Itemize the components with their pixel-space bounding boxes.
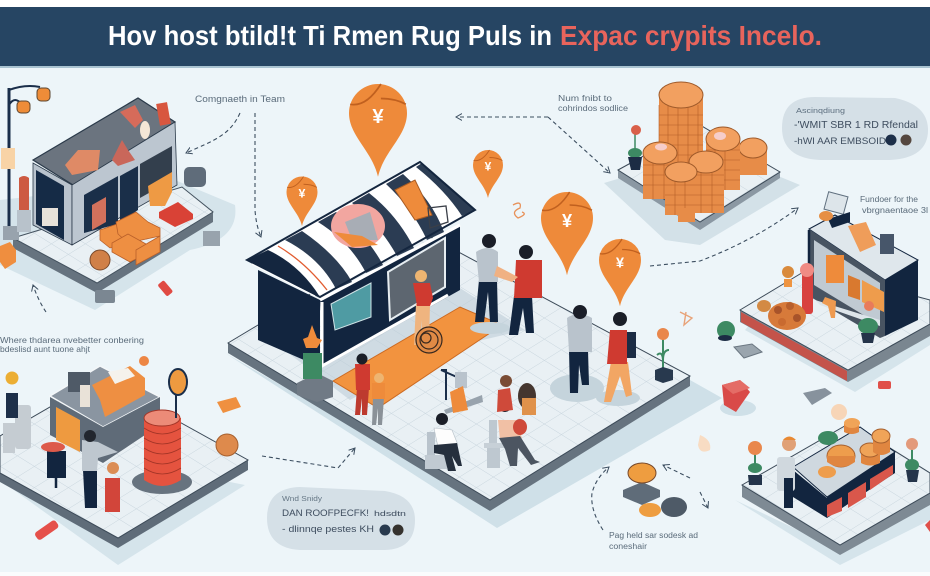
arrow: bottom-left: [262, 448, 355, 468]
seated man: [425, 413, 462, 471]
balloon sign: [169, 369, 187, 418]
pin 1: ¥: [372, 106, 384, 128]
flourish left of platform: [698, 435, 710, 452]
small orange pot: [782, 266, 794, 287]
ticket: [157, 280, 173, 297]
counter: [793, 427, 895, 518]
pin 3: ¥: [485, 159, 492, 173]
striped roof: [247, 162, 475, 297]
label: left bottom: Where thdarea nvebetter conbering: [0, 335, 144, 345]
arrow: to main platform: [592, 467, 609, 530]
left wall: [258, 270, 320, 367]
pin 1: [349, 84, 407, 177]
pin 5: ¥: [616, 255, 625, 271]
scene: bottom-left stall: [0, 356, 248, 565]
label: left bottom: [0, 335, 144, 354]
poster screen: [331, 283, 371, 330]
man in shirt: [82, 430, 118, 508]
fruit heap: [757, 300, 806, 330]
machine: [441, 370, 483, 414]
round pie: [90, 250, 110, 270]
arrow: to coin platform: [548, 117, 610, 173]
potted flower left: [748, 441, 762, 485]
small flourish lower right: [680, 312, 692, 325]
people on main platform: [355, 234, 640, 471]
woman with orange trousers: [596, 312, 640, 406]
woman in red top: [497, 375, 513, 412]
booth: [809, 192, 918, 338]
callout: top right: Ascinqdiung: [796, 108, 845, 115]
pin 2: [286, 176, 318, 226]
pin 4: ¥: [562, 211, 573, 231]
potted flower: [628, 125, 642, 170]
frame: [320, 225, 460, 300]
arrow: pin to right kiosk: [650, 208, 798, 266]
pin 4: [541, 192, 593, 275]
callout: bottom: - dlinnqe pestes KH: [282, 524, 374, 535]
arrow: to kiosk: [186, 113, 240, 153]
man in red shirt: [494, 245, 542, 335]
shop building: [247, 162, 475, 367]
red box: [159, 202, 193, 227]
label: coin display: [609, 531, 698, 551]
title banner: Expac crypits Incelo.: [560, 20, 822, 51]
kiosk body: [33, 98, 177, 245]
visitor in red: [355, 354, 370, 415]
stall box: [50, 356, 160, 463]
label: coin stacks: Num fnibt to: [558, 94, 613, 103]
man in grey shirt: [470, 234, 510, 334]
glass door: [388, 238, 445, 320]
callout: bottom: hdsdtn: [374, 511, 406, 518]
standing man right: [550, 305, 604, 402]
red cube: [720, 380, 756, 416]
ticket: [34, 519, 60, 541]
planter by shop: [297, 325, 333, 402]
stack front: [665, 162, 697, 222]
coin display: [623, 463, 687, 517]
person with bag: [518, 383, 536, 415]
label: coin display: Pag held sar sodesk ad: [609, 531, 698, 540]
label: right kiosk: vbrgnaentaoe 3l: [862, 206, 928, 215]
child in red coat: [105, 462, 120, 512]
pin 5: [599, 239, 641, 306]
potted flower right: [905, 438, 919, 482]
label: right kiosk: [860, 195, 928, 215]
main platform: [225, 218, 722, 528]
orange crate: [0, 242, 16, 269]
scene: top-left kiosk: [0, 98, 235, 310]
scene: bottom-right counter: [735, 404, 930, 565]
callout: bottom: Wnd Snidy: [282, 496, 323, 503]
pink-clad visitor: [800, 263, 814, 314]
callout: top right: [782, 97, 928, 160]
scene: right kiosk: [717, 192, 930, 392]
plant on floor: [717, 321, 735, 341]
bottom strip: [0, 572, 930, 576]
red tag: [878, 381, 891, 389]
plant and pole base: [17, 176, 31, 232]
shrub behind counter: [818, 431, 838, 445]
orange block: [217, 397, 241, 413]
map pins: [286, 84, 641, 306]
coin cakes: [818, 418, 890, 478]
small flourish near pin: [513, 203, 524, 218]
arrow: shop to coins: [456, 116, 548, 118]
arrow: to coin display: [663, 465, 690, 478]
arrow: down to shop: [255, 113, 261, 237]
side bag: [184, 167, 206, 187]
stack left: [643, 142, 677, 199]
title banner: [0, 0, 930, 68]
callout: bottom: DAN ROOFPECFK!: [282, 508, 369, 519]
arrow: kiosk up: [33, 285, 46, 312]
scene: coin stacks: [604, 82, 800, 245]
label: top-left: Comgnaeth in Team: [195, 94, 285, 104]
worker with yellow hat: [3, 372, 31, 453]
rooftop goods: [65, 102, 171, 175]
street lamp: [1, 86, 50, 226]
orange coin: [216, 434, 238, 456]
pin 3: [473, 150, 503, 198]
roof illustration: orange sack: [395, 180, 448, 228]
label: coin display: coneshair: [609, 542, 647, 551]
title banner: Hov host btild!t Ti Rmen Rug Puls in: [108, 20, 552, 51]
label: left bottom: bdeslisd aunt tuone ahjt: [0, 344, 91, 354]
label: coin stacks: [558, 94, 629, 113]
potted flower front: [858, 301, 878, 343]
rope coil: [416, 327, 442, 353]
label: coin stacks: cohrindos sodlice: [558, 104, 629, 113]
callout: top right: -'WMIT SBR 1 RD Rfendal: [794, 120, 918, 131]
front wall: [320, 225, 460, 367]
pin 2: ¥: [299, 186, 306, 200]
roof illustration: pink elephant: [331, 204, 385, 248]
faded flower: [831, 404, 847, 420]
small flower marker right: [925, 520, 930, 532]
tall coin stack: [659, 82, 703, 172]
small dog: [822, 297, 836, 318]
bin: [41, 442, 66, 488]
stack centre rear: [706, 127, 740, 190]
vendor: [777, 436, 796, 508]
callout: bottom: [267, 487, 415, 550]
flower pot right of main platform: [655, 328, 673, 383]
stack right rear: [739, 138, 767, 175]
grey book: [803, 388, 832, 405]
woman at shop door: [413, 270, 433, 345]
orange parcels: [100, 212, 160, 265]
stack front mid: [689, 151, 724, 213]
orange carpet: [333, 307, 502, 408]
callout: top right: -hWI AAR EMBSOID: [794, 136, 886, 147]
red cylinder stack: [132, 410, 192, 494]
arrow: bottom right: [700, 492, 708, 508]
label: right kiosk: Fundoer for the: [860, 195, 919, 204]
child: [372, 373, 385, 425]
book: [734, 344, 762, 358]
seated woman with bench: [484, 400, 540, 468]
goods on booth roof: [819, 192, 894, 254]
